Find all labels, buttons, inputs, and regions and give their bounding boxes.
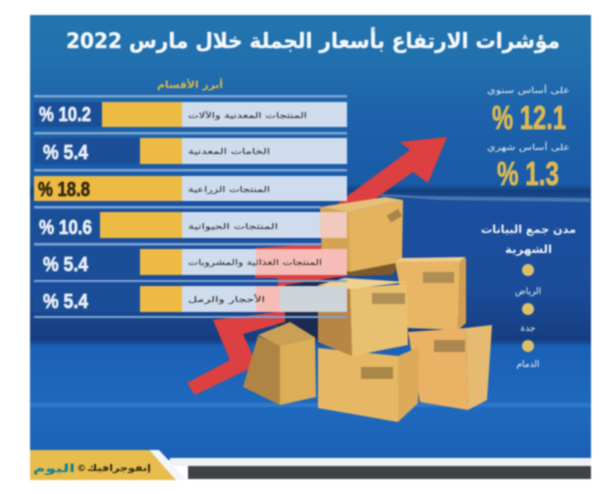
city: Dammam: الدمام — [516, 360, 540, 370]
row: agricultural products: المنتجات الزراعية — [188, 185, 270, 194]
bar chart: sectors — [34, 95, 347, 318]
row lines — [34, 95, 347, 318]
row: metal ores — [34, 138, 347, 164]
stat: annual: على أساس سنوي — [487, 84, 570, 96]
row: agricultural products: % 18.8 — [38, 179, 90, 201]
title: مؤشرات الارتفاع بأسعار الجملة خلال مارس 2022 — [66, 26, 560, 53]
stat: annual — [487, 84, 570, 136]
footer credit: اليوم — [33, 462, 75, 475]
footer credit: © — [77, 464, 86, 474]
heading: top sectors: أبرز الأقسام — [157, 78, 223, 91]
red rising arrow — [187, 137, 447, 395]
row: metal ores: % 5.4 — [43, 142, 89, 164]
box: top — [320, 197, 403, 276]
row: stones and sand — [34, 286, 347, 313]
cardboard boxes — [243, 197, 492, 422]
box: right upper — [395, 257, 466, 330]
city: Jeddah: جدة — [520, 324, 536, 334]
row: food and beverages — [34, 249, 347, 276]
row: agricultural products — [34, 176, 347, 201]
stat: monthly — [487, 141, 570, 192]
city: Dammam — [516, 340, 540, 370]
footer credit — [33, 462, 151, 475]
city: Jeddah — [520, 303, 536, 334]
footer credit tab — [30, 450, 176, 480]
cities heading: الشهرية — [505, 243, 552, 256]
row: food and beverages: المنتجات الغذائية والمشروبات — [188, 258, 322, 267]
row: stones and sand: الأحجار والرمل — [188, 294, 265, 304]
row: food and beverages: % 5.4 — [43, 254, 89, 276]
row: metal products and machinery: المنتجات المعدنية والآلات — [188, 110, 307, 120]
box: bottom centre — [318, 347, 419, 422]
box: centre — [318, 278, 408, 356]
row: metal products and machinery: % 10.2 — [39, 104, 91, 126]
box: right lower — [408, 325, 492, 410]
box: small left — [243, 322, 316, 405]
stat: monthly: على أساس شهري — [487, 141, 570, 153]
stat: annual: % 12.1 — [492, 99, 566, 136]
footer credit: إنفوجرافيك — [87, 464, 151, 474]
row: metal products and machinery — [34, 102, 347, 127]
row: animal products — [34, 212, 347, 239]
cities heading: مدن جمع البيانات — [481, 223, 576, 236]
cities heading — [481, 223, 576, 256]
footer — [30, 450, 591, 480]
city: Riyadh — [515, 264, 541, 297]
row: animal products: المنتجات الحيوانية — [188, 222, 278, 231]
row: stones and sand: % 5.4 — [43, 291, 89, 313]
stat: monthly: % 1.3 — [497, 155, 559, 192]
row: metal ores: الخامات المعدنية — [188, 147, 270, 156]
row: animal products: % 10.6 — [39, 217, 92, 239]
city: Riyadh: الرياض — [515, 287, 541, 297]
